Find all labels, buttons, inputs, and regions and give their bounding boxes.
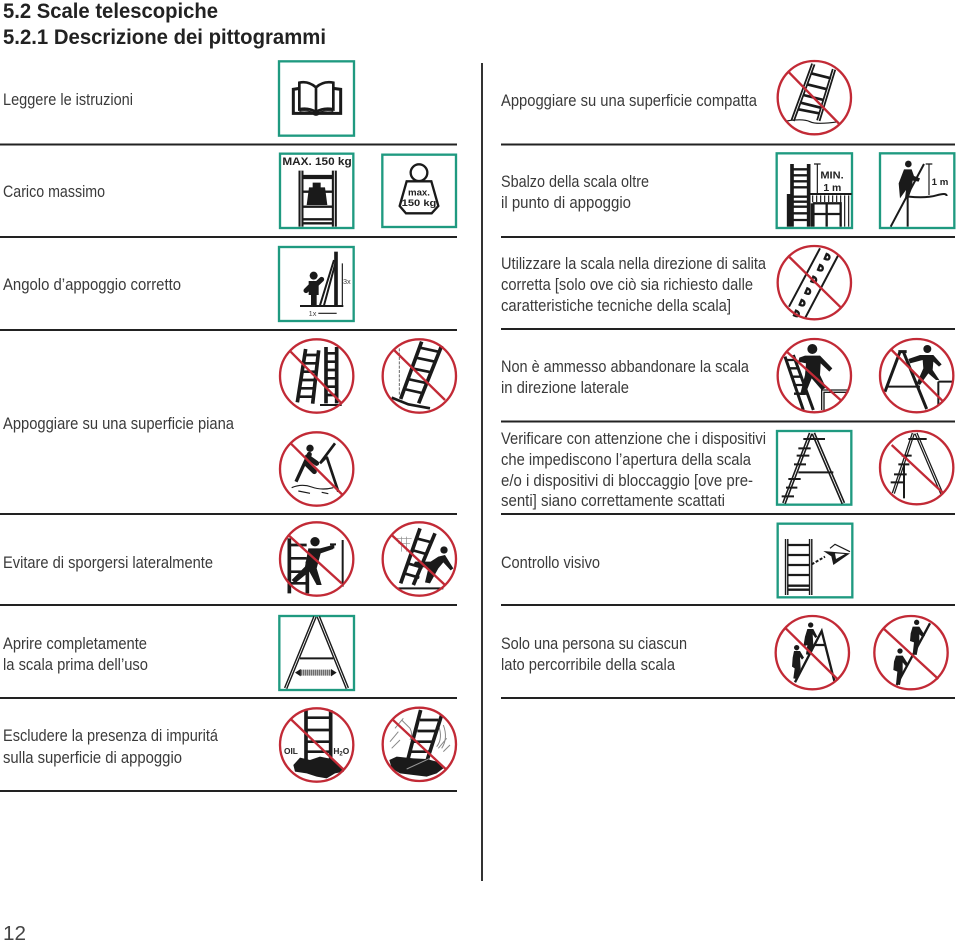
text: Non è ammesso [501,357,749,397]
icon: open ladder fully [279,616,354,690]
icon: no oil or water [280,708,353,782]
icon: min 1 m overhang building: 1 m [823,183,841,194]
icon: no soft surface [778,61,851,134]
text: Sbalzo della scala: Sbalzo della scala oltre [501,172,649,191]
text: Verificare con attenzione: senti] siano correttamente scattati [501,491,725,510]
text: Aprire completamente: la scala prima dell’uso [3,655,148,674]
icon: no dirt or ice [383,708,456,781]
text: Appoggiare su una superficie piana: Appoggiare su una superficie piana [3,414,234,433]
icon: no uneven surface, two ladders [280,339,353,413]
icon: one person, straight ladder [874,616,948,689]
icon: no side exit, step ladder [880,339,953,412]
text: Angolo d'appoggio corretto: Angolo d’appoggio corretto [3,275,181,294]
text: Aprire completamente [3,634,148,674]
icon: no oil or water: 2 [339,752,343,758]
text: Solo una persona [501,634,687,674]
icon: correct angle: 1x [309,309,317,318]
text: Non è ammesso: Non è ammesso abbandonare la scala [501,357,749,376]
icon: ladder max 150 kg [280,154,353,228]
title: 5.2 Scale telescopiche [3,0,218,23]
icon: one person, step ladder [776,616,849,689]
text: Appoggiare su una superficie compatta: Appoggiare su una superficie compatta [501,91,757,110]
text: Utilizzare la scala: Utilizzare la scala nella direzione di salita [501,254,766,273]
text: Verificare con attenzione: che impediscono l’apertura della scala [501,450,751,469]
icon: 1 m overhang ledge: 1 m [932,177,948,187]
icon: no ladder on slope [383,339,456,413]
text: Escludere la presenza: Escludere la presenza di impuritá [3,726,218,745]
text: Evitare di sporgersi lateralmente: Evitare di sporgersi lateralmente [3,553,213,572]
icon: no oil or water: H [333,746,339,756]
icon: weight max 150 kg [382,155,456,227]
icon: book [279,61,354,136]
text: Verificare con attenzione: e/o i dispositivi di bloccaggio [ove pre- [501,471,753,490]
icon: no leaning sideways with hammer [280,522,353,596]
text: Utilizzare la scala [501,254,766,315]
icon: weight max 150 kg: max. [408,188,430,198]
title [3,0,326,49]
icon: correct angle [279,247,354,321]
icon: step ladder unlocked [880,431,953,504]
text: Leggere le istruzioni: Leggere le istruzioni [3,90,133,109]
icon: weight max 150 kg: 150 kg [402,198,437,208]
text: Sbalzo della scala [501,172,649,212]
text: Aprire completamente: Aprire completamente [3,634,147,653]
text: Solo una persona: Solo una persona su ciascun [501,634,687,653]
icon: open step ladder correct [777,431,851,505]
icon: correct angle: 3x [343,277,351,286]
icon: min 1 m overhang building: MIN. [820,170,844,181]
title: 5.2.1 Descrizione dei pittogrammi [3,26,326,49]
text: Utilizzare la scala: caratteristiche tecniche della scala] [501,296,731,315]
icon: min 1 m overhang building [777,153,852,228]
text: Escludere la presenza: sulla superficie di appoggio [3,748,182,767]
text: Carico massimo: Carico massimo [3,182,105,201]
icon: no side exit, straight ladder [778,339,851,412]
text: Verificare con attenzione: Verificare con attenzione che i dispositivi [501,429,766,448]
text: Solo una persona: lato percorribile della scala [501,655,675,674]
icon: ladder max 150 kg: MAX. 150 kg [282,156,352,168]
icon: no oil or water: OIL [284,746,298,756]
icon: no oil or water: O [343,746,350,756]
icon: visual check [778,524,852,597]
icon: 1 m overhang ledge [880,153,954,228]
icon: no ladder on rough ground [280,432,353,506]
text: Controllo visivo: Controllo visivo [501,553,600,572]
icon: no leaning sideways with ladder [383,522,456,596]
icon: no reverse ladder direction [778,246,851,319]
text: Sbalzo della scala: il punto di appoggio [501,193,631,212]
text: Verificare con attenzione [501,429,766,510]
text: Non è ammesso: in direzione laterale [501,378,629,397]
text: Utilizzare la scala: corretta [solo ove ciò sia richiesto dalle [501,275,753,294]
text: Escludere la presenza [3,726,218,767]
